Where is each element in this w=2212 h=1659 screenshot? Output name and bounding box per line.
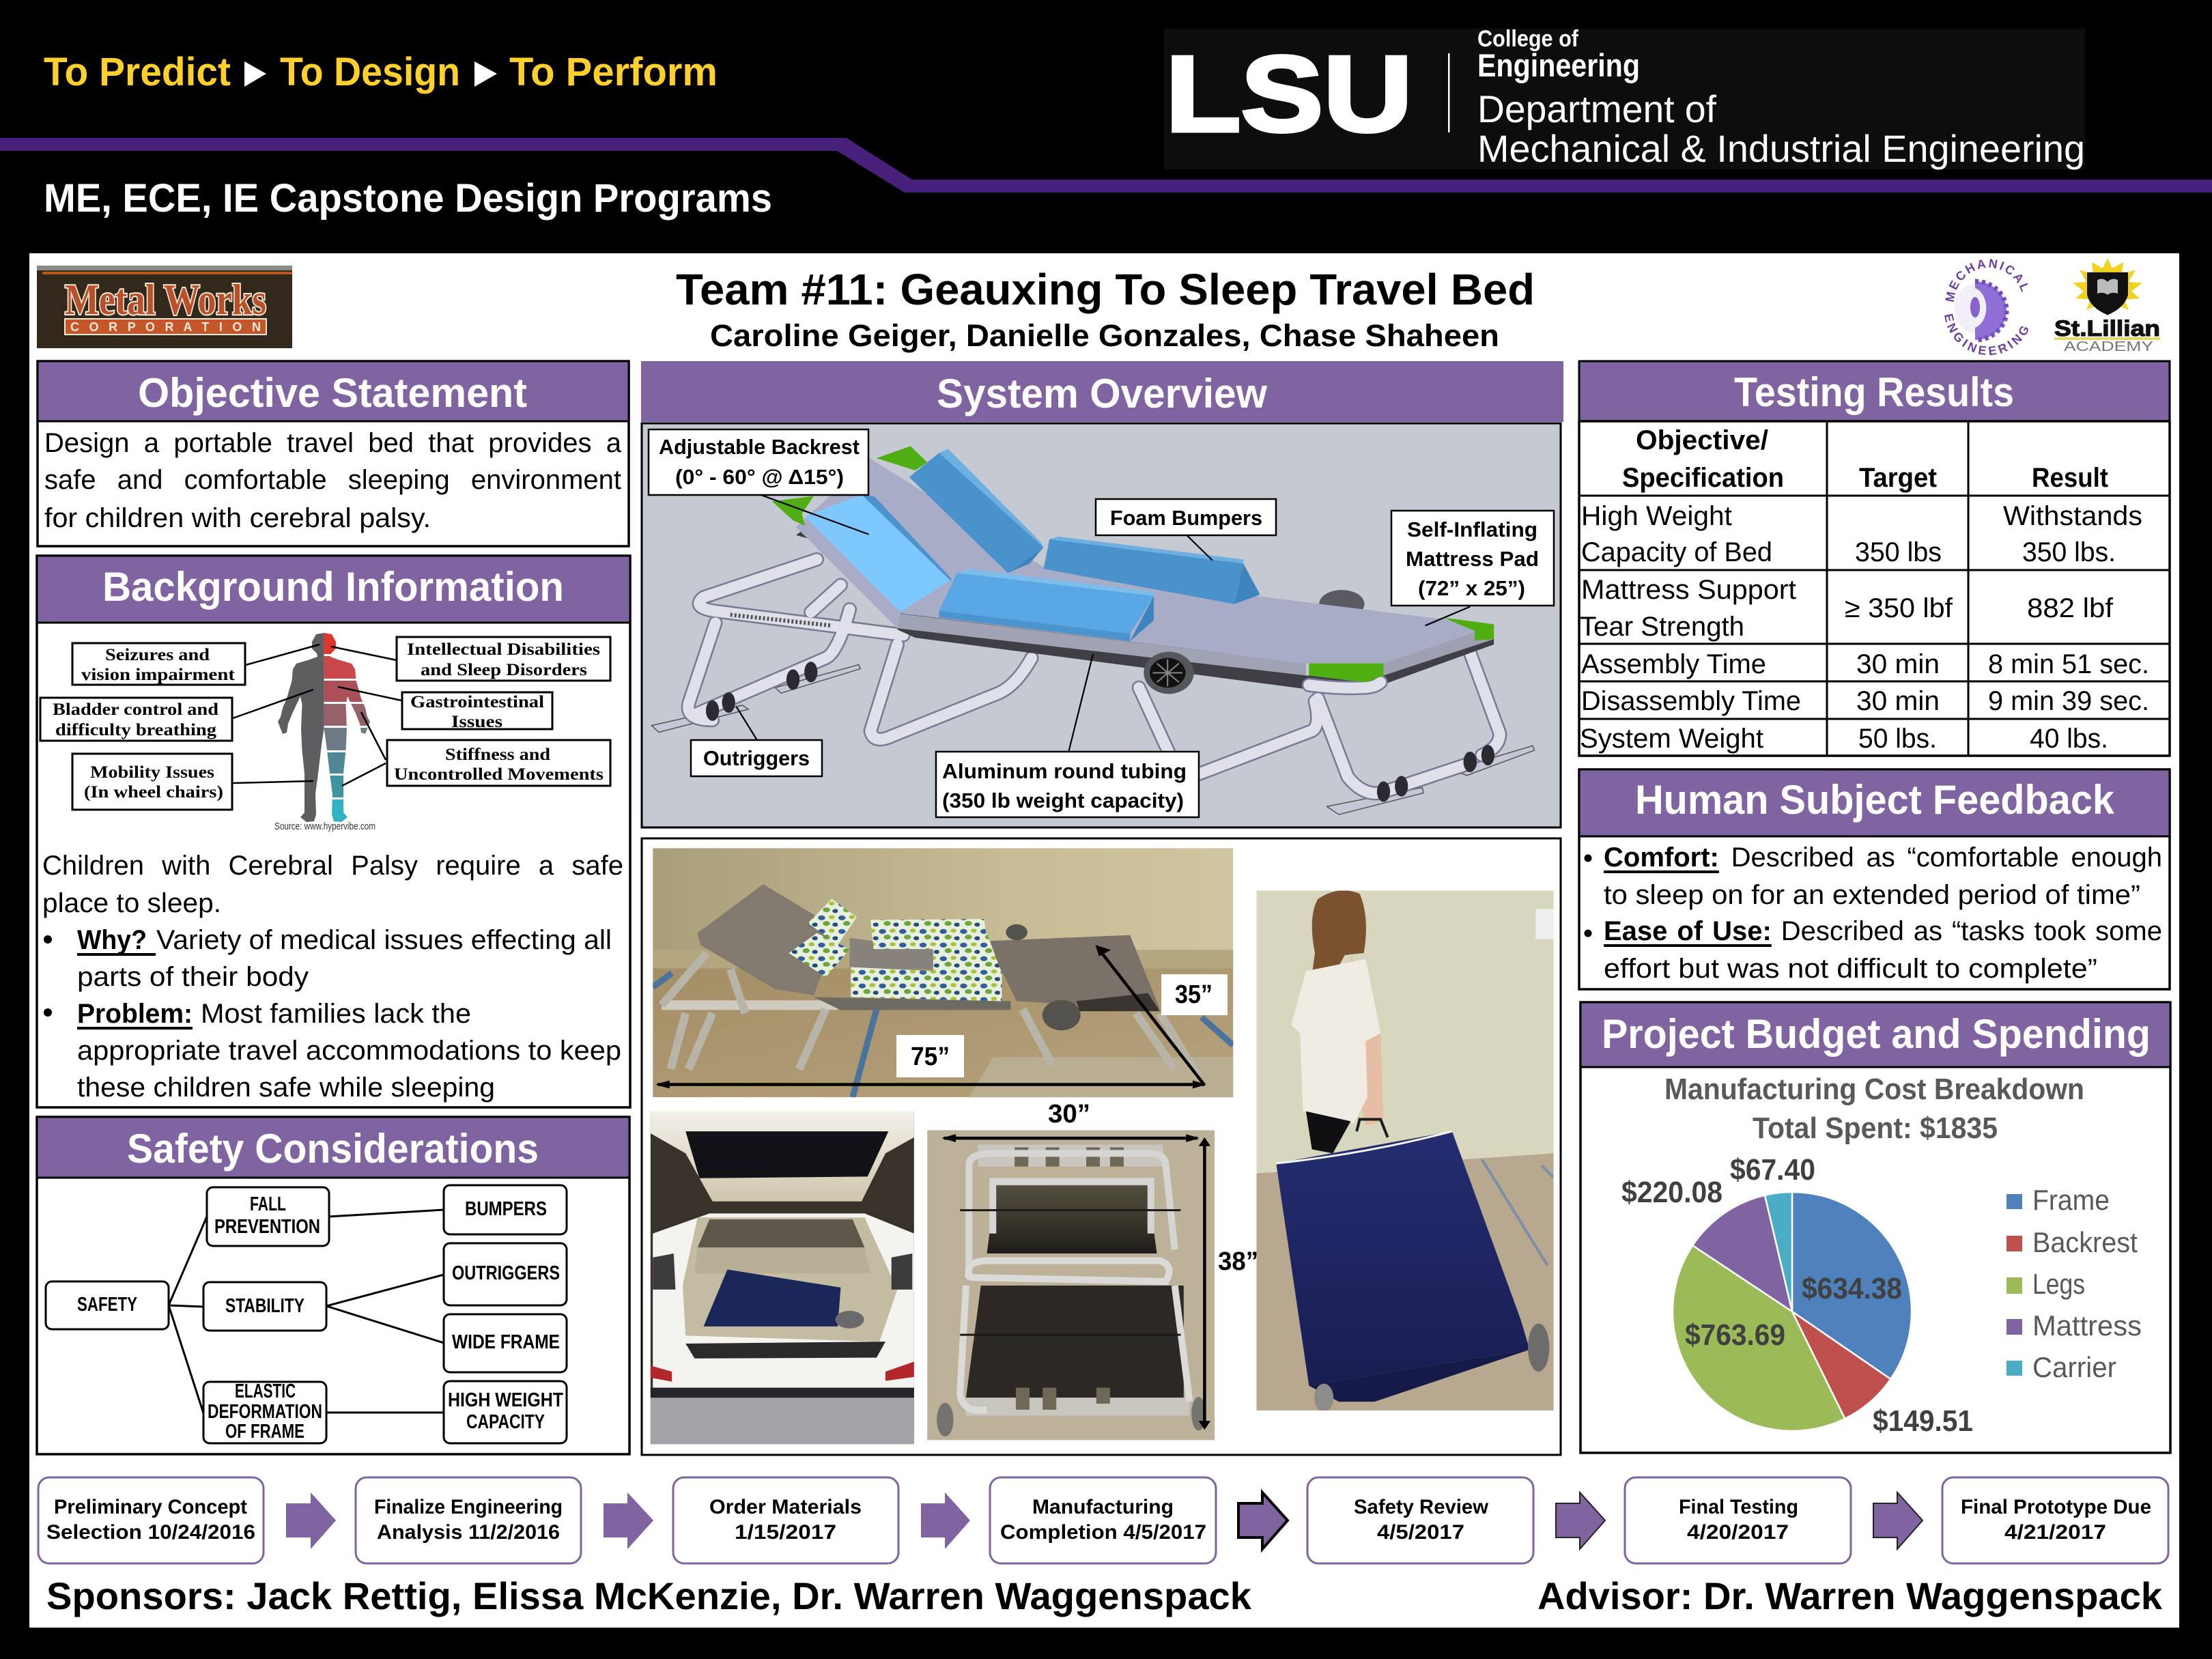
background text: these children safe while sleeping: [77, 1073, 495, 1103]
far wheel: [1319, 590, 1365, 618]
panel: system overview: [641, 361, 1563, 827]
results table: Tear Strength: [1580, 612, 1744, 642]
background text: [42, 849, 623, 1103]
header: safety considerations: Safety Considerations: [127, 1126, 539, 1172]
sponsor logo: Metal Works: C O R P O R A T I O N: [70, 320, 261, 334]
header: background information: [37, 556, 630, 623]
callout: bladder control: [40, 698, 232, 741]
node: elastic deformation: OF FRAME: [225, 1421, 304, 1443]
callout: stiffness: Stiffness and: [445, 746, 550, 764]
tagline: To Perform: [509, 50, 718, 94]
node: wide frame: [444, 1314, 567, 1372]
dimension arrows: [655, 945, 1210, 1430]
results table: 9 min 39 sec.: [1988, 686, 2149, 716]
panel: prototype photographs: [642, 838, 1561, 1455]
arrow: [1556, 1492, 1605, 1549]
callout: bladder control: difficulty breathing: [55, 721, 217, 739]
node: high weight capacity: CAPACITY: [466, 1411, 545, 1433]
callout: mobility: [72, 754, 232, 810]
program title: ME, ECE, IE Capstone Design Programs: [44, 176, 772, 221]
chart title: Manufacturing Cost Breakdown: [1664, 1073, 2084, 1106]
background text: Problem:: [77, 999, 193, 1029]
step: preliminary concept: Selection 10/24/2016: [46, 1521, 255, 1544]
dimension: 38 inches: 38”: [1218, 1247, 1258, 1276]
body diagram: [40, 633, 610, 832]
objective text: Design a portable travel bed that provides a: [44, 428, 621, 458]
results table: [1579, 421, 2170, 756]
callout: mattress pad: Mattress Pad: [1406, 547, 1539, 571]
pie data labels: $67.40: [1730, 1153, 1815, 1187]
results table: Objective/: [1636, 425, 1768, 455]
results table: Disassembly Time: [1581, 686, 1801, 716]
results table: 30 min: [1856, 686, 1940, 716]
pie chart: [1673, 1192, 1912, 1431]
objective text: safe and comfortable sleeping environment: [44, 465, 621, 495]
LSU engineering logo: Department of: [1477, 87, 1716, 130]
callout: intellectual disabilities: and Sleep Disorders: [421, 661, 587, 679]
node: safety: SAFETY: [77, 1294, 137, 1316]
slice: backrest: [1792, 1311, 1890, 1419]
LSU engineering logo: LSU: [1165, 34, 1413, 154]
node: elastic deformation: [203, 1380, 326, 1443]
logo: mechanical engineering gear: ENGINEERING: [1944, 314, 2028, 355]
step: manufacturing: Manufacturing: [1032, 1496, 1174, 1518]
arrow: [604, 1492, 653, 1549]
results table: 882 lbf: [2027, 593, 2114, 623]
callout: seizures: Seizures and: [105, 646, 210, 664]
callout: bladder control: Bladder control and: [53, 700, 218, 719]
results table: 350 lbs.: [2022, 537, 2116, 567]
rail top: [1309, 682, 1380, 688]
step: safety review: [1307, 1477, 1533, 1563]
callout: stiffness: [387, 740, 610, 786]
project timeline: [38, 1477, 2168, 1563]
callout: stiffness: Uncontrolled Movements: [394, 765, 604, 784]
feedback text: to sleep on for an extended period of time”: [1604, 880, 2140, 910]
LSU engineering logo: College of: [1477, 26, 1579, 52]
chart title: [1664, 1073, 2084, 1145]
results table: Capacity of Bed: [1581, 537, 1772, 567]
dimension: 75 inches: 75”: [911, 1043, 950, 1071]
step: finalize engineering: Finalize Engineering: [374, 1496, 563, 1518]
callout: aluminum tubing: (350 lb weight capacity): [942, 789, 1184, 812]
tubular frame: [688, 559, 1500, 793]
CAD illustration of travel bed: [642, 423, 1561, 827]
leader lines: [737, 495, 1470, 752]
background text: appropriate travel accommodations to keep: [77, 1036, 621, 1066]
logo: St. Lillian Academy: [2054, 258, 2160, 354]
header: project budget: [1580, 1002, 2170, 1067]
callout: mobility: Mobility Issues: [90, 763, 214, 782]
header banner: [0, 26, 2212, 221]
logo: mechanical engineering gear: MECHANICAL: [1946, 259, 2028, 302]
step: order materials: 1/15/2017: [735, 1521, 836, 1544]
chart legend: Mattress: [2032, 1309, 2142, 1342]
sponsors: Sponsors: Jack Rettig, Elissa McKenzie, Dr. Warren Waggenspack: [46, 1574, 1252, 1617]
background text: Why?: [77, 925, 147, 955]
chart legend: Backrest: [2032, 1226, 2138, 1258]
callout: foam bumpers: Foam Bumpers: [1110, 506, 1262, 530]
header: human subject feedback: [1579, 769, 2170, 836]
step: final testing: [1625, 1477, 1851, 1563]
arrow: [1873, 1492, 1923, 1549]
node: stability: STABILITY: [225, 1295, 304, 1317]
header: objective statement: [38, 361, 629, 421]
tagline: To Predict: [44, 50, 231, 94]
callout: aluminum tubing: Aluminum round tubing: [942, 759, 1187, 783]
tagline: To Design: [280, 50, 460, 94]
node: stability: [203, 1282, 326, 1331]
panel: human subject feedback: [1579, 769, 2170, 989]
callout: adjustable backrest: [649, 429, 868, 495]
slice: legs: [1673, 1245, 1845, 1431]
results table: Mattress Support: [1581, 575, 1796, 605]
step: final prototype: [1942, 1477, 2168, 1563]
results table: 8 min 51 sec.: [1988, 649, 2149, 679]
logo: St. Lillian Academy: St.Lillian: [2054, 316, 2160, 341]
step: preliminary concept: [38, 1477, 264, 1563]
outrigger feet: [651, 665, 1535, 814]
tagline: [44, 50, 718, 94]
header: testing results: Testing Results: [1734, 369, 2014, 415]
node: high weight capacity: HIGH WEIGHT: [448, 1389, 563, 1411]
arrow: [1238, 1492, 1288, 1549]
results table: 350 lbs: [1855, 537, 1942, 567]
node: high weight capacity: [444, 1381, 567, 1443]
step: final testing: Final Testing: [1679, 1496, 1798, 1518]
arrow: [921, 1492, 970, 1549]
results table: 30 min: [1856, 649, 1940, 679]
sponsor logo: Metal Works: [37, 266, 292, 348]
callout: gastrointestinal: [402, 692, 552, 731]
feedback text: Comfort: Described as “comfortable enough: [1604, 842, 2162, 873]
background text: parts of their body: [77, 962, 309, 992]
step: final prototype: Final Prototype Due: [1961, 1496, 2151, 1518]
step: preliminary concept: Preliminary Concept: [54, 1496, 247, 1518]
callout: intellectual disabilities: [397, 637, 610, 681]
header: project budget: Project Budget and Spending: [1602, 1011, 2151, 1057]
results table: ≥ 350 lbf: [1845, 593, 1953, 623]
step: final prototype: 4/21/2017: [2004, 1521, 2106, 1544]
background text: Variety of medical issues effecting all: [156, 925, 612, 955]
step: order materials: Order Materials: [709, 1496, 862, 1518]
callout: gastrointestinal: Gastrointestinal: [410, 693, 544, 711]
dimension: 35 inches: 35”: [1175, 980, 1213, 1009]
node: elastic deformation: ELASTIC: [235, 1380, 296, 1402]
node: safety: [46, 1281, 169, 1329]
objective text: for children with cerebral palsy.: [44, 503, 431, 533]
pie data labels: $763.69: [1685, 1318, 1785, 1352]
chart legend: [2007, 1184, 2142, 1383]
callout: adjustable backrest: Adjustable Backrest: [659, 435, 860, 459]
slice: frame: [1792, 1192, 1912, 1379]
header: human subject feedback: Human Subject Feedback: [1635, 777, 2115, 823]
foam pads: [805, 449, 1260, 641]
pie data labels: [1621, 1153, 1973, 1438]
callout: mattress pad: (72” x 25”): [1418, 576, 1525, 600]
node: outriggers: [444, 1243, 567, 1305]
node: elastic deformation: DEFORMATION: [208, 1401, 322, 1423]
feedback text: [1584, 840, 2162, 984]
logo: mechanical engineering gear: [1944, 259, 2028, 355]
header: safety considerations: [37, 1117, 629, 1178]
panel: background information: [37, 556, 630, 1107]
callout: aluminum tubing: [936, 752, 1199, 817]
callout: outriggers: [691, 740, 822, 776]
node: fall prevention: FALL: [250, 1193, 286, 1215]
chart legend: Legs: [2032, 1268, 2085, 1300]
LSU engineering logo: Mechanical & Industrial Engineering: [1477, 127, 2085, 170]
node: bumpers: BUMPERS: [465, 1198, 547, 1220]
node: wide frame: WIDE FRAME: [452, 1331, 560, 1353]
results table: Specification: [1622, 463, 1784, 493]
panel: objective statement: [38, 361, 629, 546]
results table: Withstands: [2003, 501, 2142, 531]
callout: mobility: (In wheel chairs): [84, 783, 223, 802]
callout: foam bumpers: [1096, 499, 1276, 535]
panel: testing results: [1579, 361, 2170, 756]
dimension: 75 inches: [896, 1035, 964, 1077]
pie data labels: $149.51: [1873, 1404, 1973, 1438]
human figure: [278, 633, 378, 823]
callout: mattress pad: [1391, 511, 1554, 606]
callout: outriggers: Outriggers: [703, 746, 810, 770]
callout: gastrointestinal: Issues: [451, 713, 502, 731]
dimension: 30 inches: 30”: [1048, 1100, 1090, 1129]
step: finalize engineering: Analysis 11/2/2016: [377, 1521, 560, 1544]
advisor: Advisor: Dr. Warren Waggenspack: [1537, 1574, 2163, 1617]
callout: mattress pad: Self-Inflating: [1407, 517, 1537, 541]
photo: person carrying bag: [1256, 890, 1553, 1412]
chart legend: Frame: [2032, 1184, 2110, 1216]
objective text: [44, 426, 621, 533]
callout: seizures: [72, 643, 245, 685]
chart title: Total Spent: $1835: [1753, 1111, 1998, 1145]
pie data labels: $220.08: [1621, 1176, 1722, 1209]
background text: place to sleep.: [42, 888, 221, 918]
header: testing results: [1579, 361, 2170, 421]
photo: bag in vehicle: [651, 1111, 914, 1444]
node: bumpers: [444, 1185, 567, 1234]
header: objective statement: Objective Statement: [138, 370, 527, 416]
slice: mattress: [1692, 1195, 1792, 1311]
chart legend: Carrier: [2032, 1351, 2116, 1383]
title: Team #11: Geauxing To Sleep Travel Bed: [676, 265, 1535, 314]
photo: assembled bed: [653, 848, 1233, 1097]
LSU engineering logo: [1164, 26, 2085, 170]
LSU engineering logo: Engineering: [1477, 47, 1640, 83]
step: safety review: Safety Review: [1354, 1496, 1489, 1518]
results table: Assembly Time: [1581, 649, 1766, 679]
logo: St. Lillian Academy: ACADEMY: [2064, 339, 2153, 354]
step: final testing: 4/20/2017: [1687, 1521, 1789, 1544]
pie data labels: $634.38: [1802, 1272, 1902, 1305]
results table: 40 lbs.: [2030, 724, 2108, 754]
step: order materials: [673, 1477, 898, 1563]
main wheel: [1144, 652, 1194, 694]
results table: High Weight: [1581, 501, 1732, 531]
team members: Caroline Geiger, Danielle Gonzales, Chase Shaheen: [710, 318, 1499, 353]
feedback text: effort but was not difficult to complete”: [1604, 954, 2097, 984]
header: background information: Background Information: [102, 564, 564, 610]
node: fall prevention: [207, 1187, 329, 1246]
slice: carrier: [1765, 1192, 1792, 1311]
node: outriggers: OUTRIGGERS: [452, 1262, 560, 1284]
mattress platform: [796, 528, 1494, 689]
results table: 50 lbs.: [1858, 724, 1937, 754]
green corner caps: [772, 446, 1494, 682]
panel: project budget and spending: [1580, 1002, 2170, 1453]
feedback text: Ease of Use: Described as “tasks took some: [1604, 916, 2162, 946]
results table: Result: [2032, 463, 2108, 493]
node: fall prevention: PREVENTION: [214, 1216, 320, 1238]
results table: Target: [1859, 463, 1937, 493]
dimension: 35 inches: [1161, 974, 1228, 1015]
safety tree diagram: [46, 1185, 567, 1443]
source note: Source: www.hypervibe.com: [274, 821, 375, 832]
header: system overview: System Overview: [937, 371, 1267, 416]
clamps: [706, 662, 1494, 802]
results table: System Weight: [1580, 724, 1763, 754]
arrow: [286, 1492, 336, 1549]
step: manufacturing: Completion 4/5/2017: [1000, 1521, 1206, 1544]
step: safety review: 4/5/2017: [1377, 1521, 1464, 1544]
background text: Children with Cerebral Palsy require a safe: [42, 851, 623, 881]
step: finalize engineering: [356, 1477, 581, 1563]
photo: folded frame: [927, 1130, 1215, 1440]
header: system overview: [641, 361, 1563, 422]
callout: intellectual disabilities: Intellectual Disabilities: [407, 640, 600, 659]
background text: Most families lack the: [201, 999, 471, 1029]
sponsor logo: Metal Works: Metal Works: [65, 275, 266, 324]
callout: seizures: vision impairment: [81, 666, 236, 684]
step: manufacturing: [990, 1477, 1216, 1563]
callout: adjustable backrest: (0° - 60° @ Δ15°): [675, 465, 844, 489]
panel: safety considerations: [37, 1117, 629, 1454]
